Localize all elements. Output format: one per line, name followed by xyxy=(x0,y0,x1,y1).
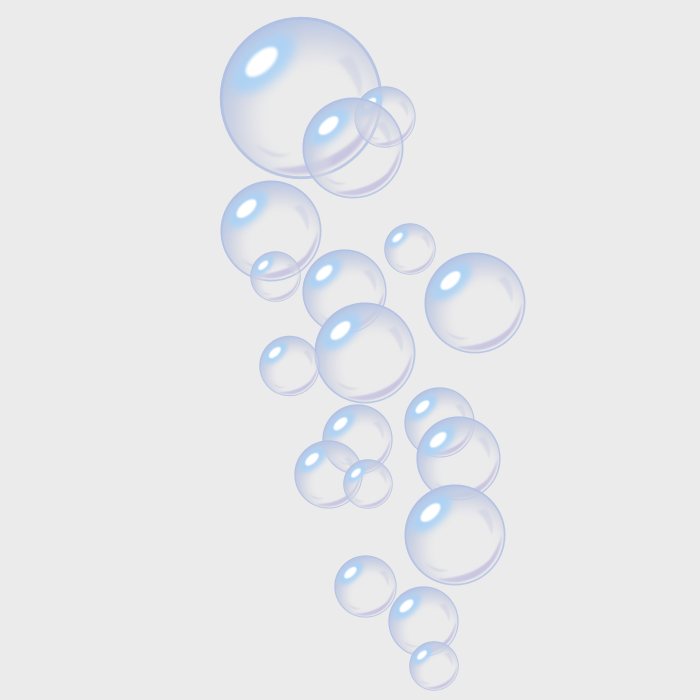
bubble 19: bottom small xyxy=(409,641,459,691)
bubble 18: bottom right xyxy=(388,586,459,657)
bubble 1: largest, top xyxy=(219,16,383,180)
bubble 10: left of centre xyxy=(259,336,320,396)
bubble 4: left upper xyxy=(220,180,322,282)
bubble 6: small, centre right xyxy=(384,223,436,275)
bubble 3: medium, overlapping top cluster xyxy=(302,97,404,199)
illustration: rising soap bubbles xyxy=(220,16,526,691)
bubble 9: centre lower xyxy=(314,302,416,404)
bubble 7: centre xyxy=(302,249,387,334)
bubble 5: small, left upper xyxy=(250,251,301,302)
bubble 8: right xyxy=(424,252,526,354)
bubble 12: right cluster upper xyxy=(404,387,475,458)
bubble 16: right lower xyxy=(404,484,506,586)
bubble 2: small, overlapping top cluster xyxy=(354,86,416,148)
bubble 15: middle cluster small xyxy=(343,459,393,509)
bubble 11: middle cluster xyxy=(322,404,393,475)
bubble 13: right cluster lower xyxy=(416,416,501,501)
bubble 17: bottom left xyxy=(334,555,397,618)
bubble 14: middle cluster left xyxy=(294,440,363,509)
